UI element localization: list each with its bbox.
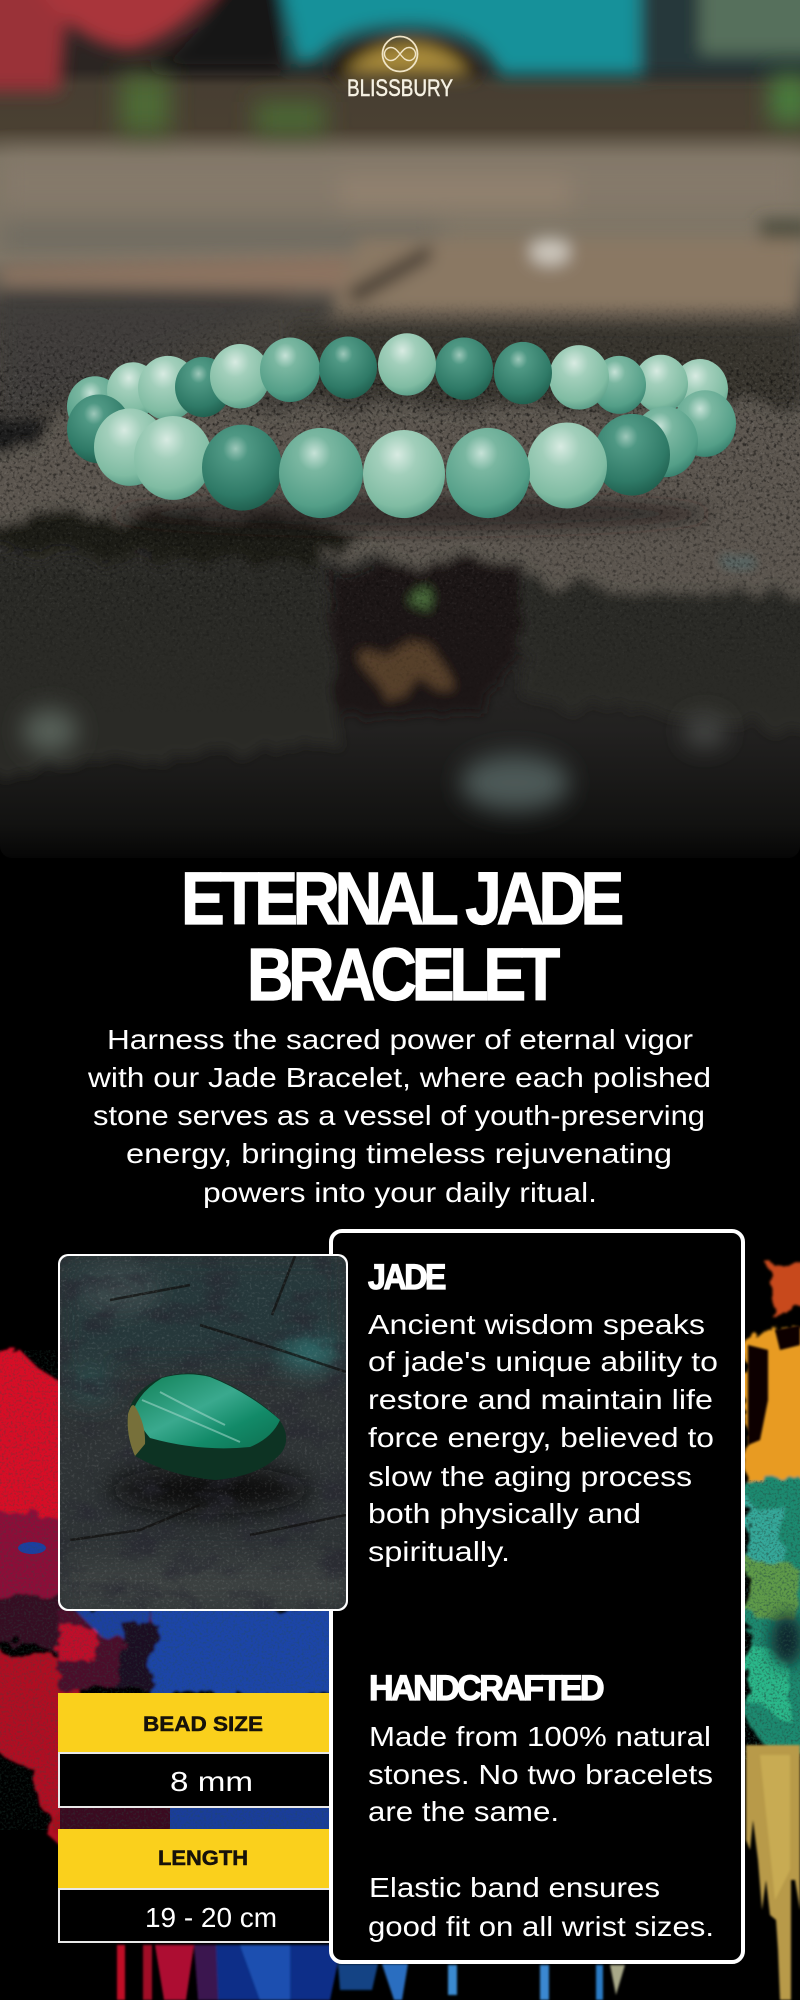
- icon: raw jade stone: [128, 1373, 286, 1480]
- heading: handcrafted: HANDCRAFTED: [369, 1669, 603, 1708]
- info panel: [331, 1231, 743, 1962]
- title: [181, 857, 622, 1016]
- spec table: bead size: 8 mm: [170, 1766, 253, 1797]
- handcrafted description: good fit on all wrist sizes.: [368, 1911, 714, 1942]
- spec table: bead size: BEAD SIZE: [143, 1713, 263, 1736]
- intro paragraph: with our Jade Bracelet, where each polished: [87, 1062, 711, 1093]
- intro paragraph: powers into your daily ritual.: [203, 1177, 597, 1208]
- spec table: length: LENGTH: [158, 1847, 248, 1870]
- intro paragraph: stone serves as a vessel of youth-preserving: [93, 1100, 705, 1131]
- logo: Blissbury: BLISSBURY: [347, 75, 453, 102]
- hero photo: jade bracelet on paving stones: [0, 0, 800, 858]
- paint drips along the bottom: [117, 1945, 625, 2000]
- paint splash: orange, teal and yellow, right: [745, 1262, 800, 2000]
- jade bead bracelet: [67, 333, 736, 531]
- jade description: of jade's unique ability to: [368, 1346, 718, 1377]
- logo: Blissbury: [347, 36, 453, 102]
- title: BRACELET: [247, 933, 560, 1016]
- heading: jade: JADE: [368, 1258, 445, 1297]
- jade description: spiritually.: [368, 1536, 510, 1567]
- handcrafted description: [368, 1721, 714, 1942]
- handcrafted description: stones. No two bracelets: [368, 1759, 713, 1790]
- title: ETERNAL JADE: [181, 857, 622, 940]
- spec table: length: [58, 1829, 330, 1942]
- jade description: [368, 1309, 718, 1567]
- jade description: force energy, believed to: [368, 1422, 714, 1453]
- intro paragraph: energy, bringing timeless rejuvenating: [126, 1138, 672, 1169]
- jade description: both physically and: [368, 1498, 641, 1529]
- jade description: restore and maintain life: [368, 1384, 713, 1415]
- jade description: Ancient wisdom speaks: [368, 1309, 705, 1340]
- paint splash: red and blue, left: [0, 1346, 340, 1850]
- handcrafted description: Elastic band ensures: [369, 1872, 660, 1903]
- handcrafted description: are the same.: [368, 1796, 559, 1827]
- intro paragraph: [87, 1024, 711, 1208]
- jade stone photo: [58, 1254, 348, 1611]
- spec table: bead size: [58, 1693, 330, 1807]
- spec table: length: 19 - 20 cm: [145, 1902, 277, 1933]
- intro paragraph: Harness the sacred power of eternal vigor: [107, 1024, 693, 1055]
- jade description: slow the aging process: [368, 1461, 692, 1492]
- handcrafted description: Made from 100% natural: [369, 1721, 711, 1752]
